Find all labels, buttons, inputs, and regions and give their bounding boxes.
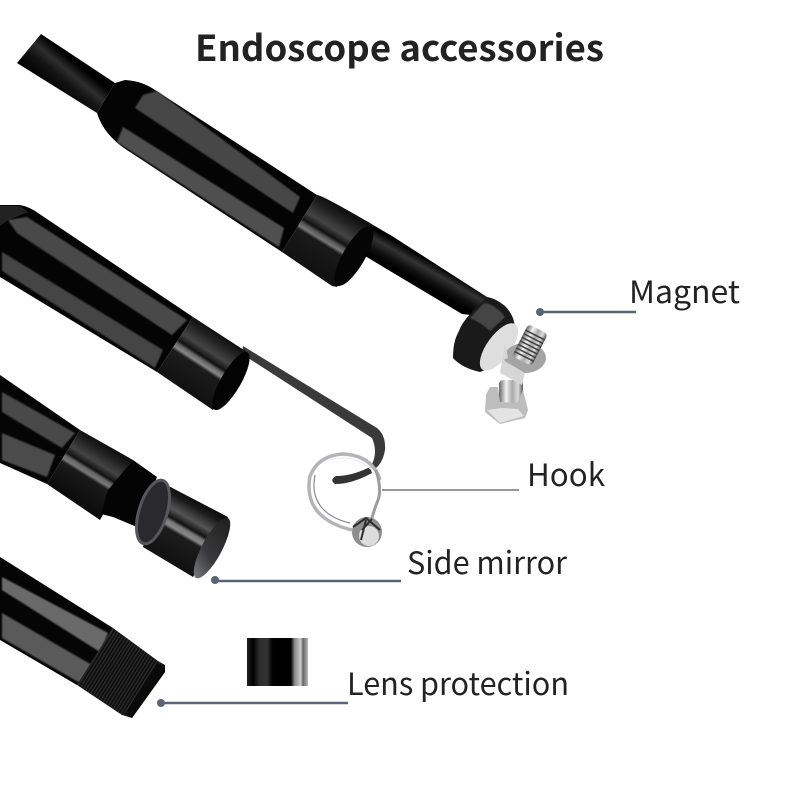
bolt shank (499, 380, 523, 410)
ring (309, 454, 382, 547)
hook label: Hook (527, 450, 605, 495)
lower nut (485, 387, 528, 424)
callout: lens protection (157, 659, 569, 707)
magnet head highlight (470, 303, 505, 331)
endoscope with magnet (17, 34, 525, 377)
knurled cap (77, 628, 165, 718)
magnet tool collar (282, 195, 372, 287)
magnet leader line (536, 308, 636, 316)
lens protection label: Lens protection (347, 659, 569, 704)
bolt and nuts (485, 324, 548, 424)
mirror tool collar (47, 430, 133, 520)
ring band (309, 454, 380, 530)
upper highlight band (2, 392, 75, 448)
title: Endoscope accessories (195, 20, 604, 72)
upper nut front (500, 342, 525, 385)
collar end cap (327, 221, 381, 291)
side mirror label: Side mirror (407, 538, 568, 583)
endoscope with lens protection (0, 557, 165, 718)
hook tip (332, 467, 372, 484)
magnet head (453, 297, 515, 372)
cap dark end (125, 664, 165, 718)
hook leader line (382, 489, 519, 491)
callout: magnet (536, 267, 740, 316)
upper washer (504, 343, 546, 373)
magnet tool body (97, 80, 317, 252)
magnet rod (365, 222, 497, 318)
lower highlight band (117, 127, 284, 247)
lower highlight band (2, 613, 92, 683)
mirror cylinder (143, 480, 228, 577)
bolt thread (512, 324, 548, 366)
upper highlight band (2, 577, 108, 652)
hook rod (242, 346, 385, 468)
lens protection cap (247, 638, 308, 686)
lens leader line (157, 699, 348, 707)
thin cable (17, 34, 115, 113)
lens tool body (0, 557, 113, 685)
endoscope with side mirror (0, 375, 237, 583)
lower highlight band (2, 252, 163, 368)
side mirror leader line (211, 576, 401, 584)
upper highlight band (8, 217, 187, 335)
magnet face (473, 317, 525, 377)
lower nut face (487, 408, 524, 423)
magnet label: Magnet (629, 267, 740, 312)
upper highlight band (135, 91, 300, 213)
hook tool body (0, 205, 193, 372)
head accent (0, 206, 28, 226)
hook collar end cap (206, 347, 256, 415)
collar dark end and neck (101, 460, 157, 527)
side mirror disc (130, 476, 176, 548)
ring diamond (352, 517, 382, 547)
hook tool collar (157, 317, 247, 410)
endoscope with hook (0, 205, 385, 484)
callout: side mirror (211, 538, 568, 584)
mirror tool body (0, 375, 80, 484)
lower highlight band (2, 433, 55, 477)
mirror cylinder end face (187, 513, 237, 583)
